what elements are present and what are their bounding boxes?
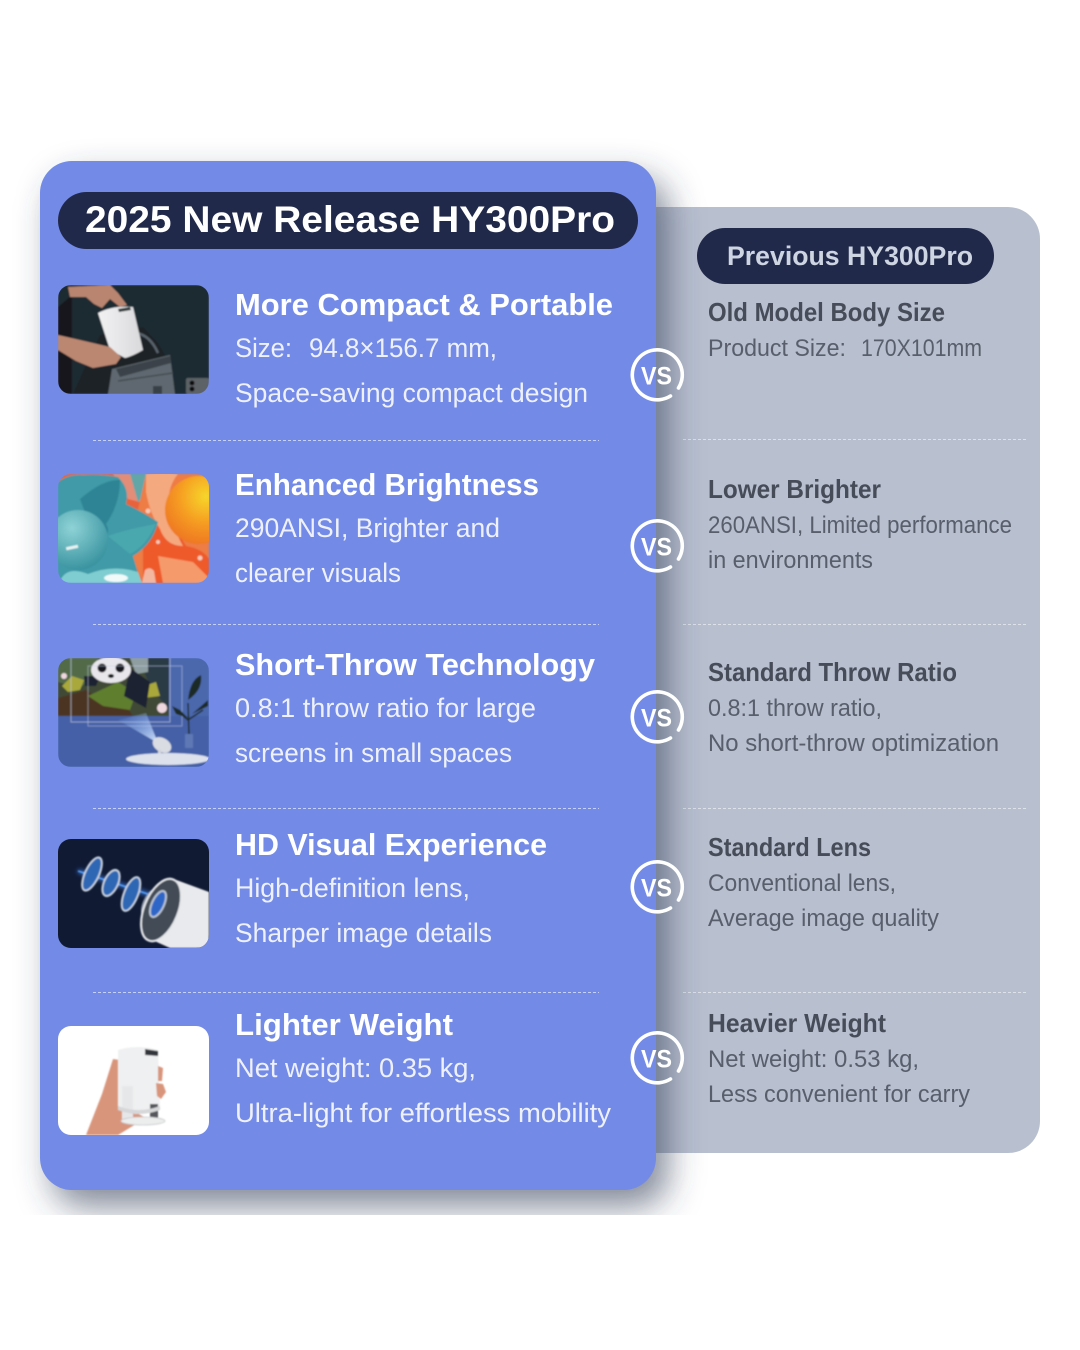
- icon: vs badge 2: [632, 521, 682, 571]
- feature: lighter weight: Ultra-light for effortless mobility: [235, 1098, 611, 1128]
- old model: weight: Heavier Weight: [708, 1008, 886, 1038]
- icon: vs badge 3: VS: [641, 704, 672, 732]
- icon: vs badge 2: VS: [641, 534, 672, 562]
- feature: lighter weight: Lighter Weight: [235, 1007, 453, 1042]
- old model: brightness: [708, 474, 1012, 574]
- old model: lens: [708, 832, 940, 932]
- icon: vs badge 4: VS: [641, 874, 672, 902]
- photo: projector in hand: [58, 1026, 209, 1135]
- old model: throw ratio: [708, 657, 999, 757]
- old model: body size: Product Size:: [708, 335, 846, 362]
- feature: enhanced brightness: Enhanced Brightness: [235, 467, 539, 502]
- feature: enhanced brightness: clearer visuals: [235, 558, 401, 588]
- photo: exploded lens: [58, 839, 209, 948]
- icon: vs badge 5: VS: [641, 1046, 672, 1074]
- old model: brightness: 260ANSI, Limited performance: [708, 512, 1012, 539]
- previous model heading: Previous HY300Pro: [727, 241, 973, 271]
- feature: short throw: Short-Throw Technology: [235, 647, 596, 682]
- feature: enhanced brightness: 290ANSI, Brighter and: [235, 513, 500, 543]
- feature: lighter weight: [235, 1007, 611, 1128]
- old model: weight: Less convenient for carry: [708, 1081, 971, 1108]
- feature: compact and portable: 94.8×156.7 mm,: [309, 333, 497, 363]
- old model: body size: [708, 297, 982, 362]
- icon: vs badge 4: [632, 862, 682, 912]
- photo: panda projected on wall: [58, 657, 210, 767]
- feature: HD visual: High-definition lens,: [235, 873, 470, 903]
- feature: HD visual: Sharper image details: [235, 918, 492, 948]
- feature: compact and portable: Size:: [235, 333, 292, 363]
- old model: lens: Average image quality: [708, 905, 940, 932]
- old model: throw ratio: No short-throw optimization: [708, 730, 999, 757]
- old model: lens: Standard Lens: [708, 832, 871, 862]
- feature: short throw: [235, 647, 596, 768]
- icon: vs badge 5: [632, 1033, 682, 1083]
- feature: lighter weight: Net weight: 0.35 kg,: [235, 1053, 476, 1083]
- old model: throw ratio: Standard Throw Ratio: [708, 657, 957, 687]
- old model: brightness: in environments: [708, 547, 873, 574]
- old model: lens: Conventional lens,: [708, 870, 896, 897]
- icon: vs badge 1: VS: [641, 362, 672, 390]
- new release heading: [58, 192, 638, 249]
- feature: HD visual: HD Visual Experience: [235, 827, 547, 862]
- feature: compact and portable: Space-saving compact design: [235, 378, 588, 408]
- icon: vs badge 3: [632, 692, 682, 742]
- panel: previous model: [560, 207, 1040, 1153]
- photo: projector into backpack: [58, 285, 209, 394]
- feature: compact and portable: [235, 287, 613, 408]
- old model: weight: [708, 1008, 971, 1108]
- feature: HD visual: [235, 827, 547, 948]
- old model: throw ratio: 0.8:1 throw ratio,: [708, 695, 882, 722]
- old model: brightness: Lower Brighter: [708, 474, 881, 504]
- previous model heading: [697, 228, 994, 284]
- new release heading: 2025 New Release HY300Pro: [85, 199, 615, 240]
- icon: vs badge 1: [632, 350, 682, 400]
- old model: weight: Net weight: 0.53 kg,: [708, 1046, 919, 1073]
- old model: body size: Old Model Body Size: [708, 297, 945, 327]
- feature: compact and portable: More Compact & Portable: [235, 287, 613, 322]
- old model: body size: 170X101mm: [861, 335, 982, 362]
- photo: colorful flowers: [58, 474, 209, 583]
- feature: short throw: screens in small spaces: [235, 738, 512, 768]
- feature: enhanced brightness: [235, 467, 539, 588]
- panel: new release: [40, 161, 656, 1190]
- feature: short throw: 0.8:1 throw ratio for large: [235, 693, 536, 723]
